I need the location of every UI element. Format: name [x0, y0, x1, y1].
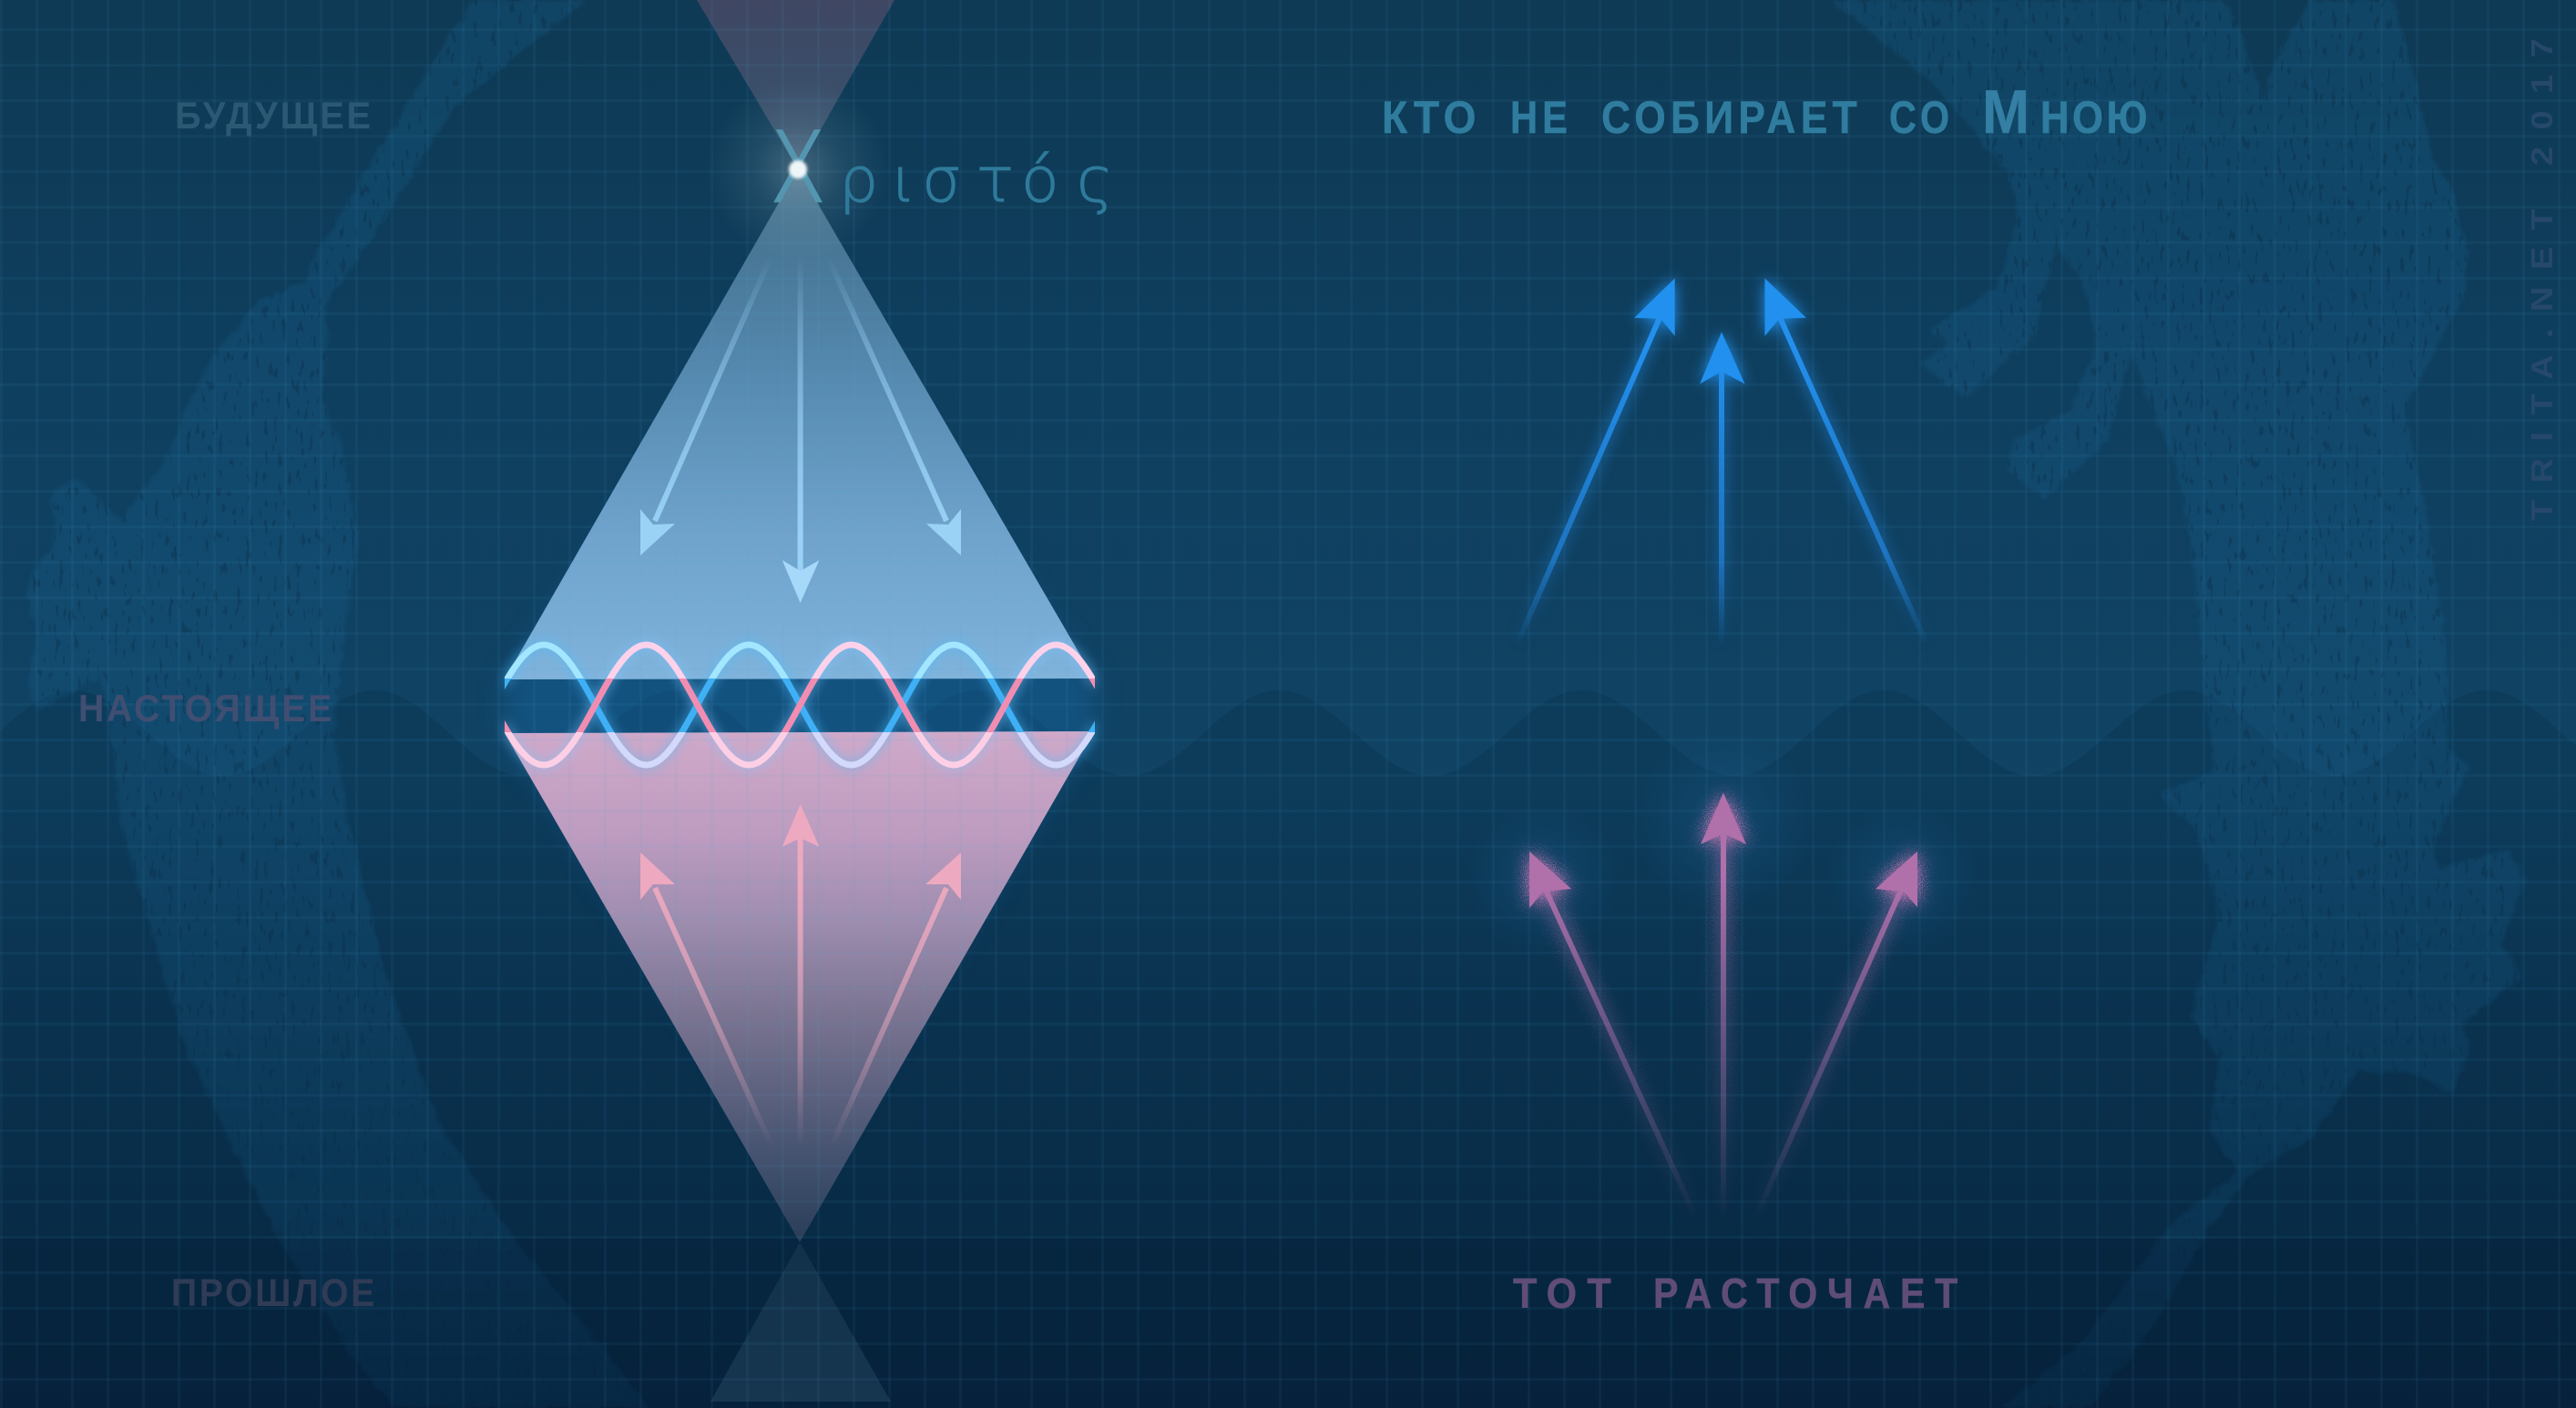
arrow: left: [640, 852, 772, 1146]
bottom cap triangle: [710, 1242, 891, 1402]
arrow: center: [782, 804, 820, 1146]
bottom dark band: [0, 1239, 2576, 1408]
arrow: center: [782, 255, 820, 603]
pink arrows inside triangle: [640, 804, 961, 1146]
arrow: left: [640, 255, 772, 556]
heading: who does not gather: НЕ: [1510, 92, 1572, 143]
capital chi: Χ: [771, 112, 825, 224]
pink wave: [505, 641, 1095, 769]
light point: [789, 160, 807, 179]
arrow: center: [1700, 332, 1745, 645]
label: past: ПРОШЛОЕ: [171, 1271, 377, 1315]
heading: who does not gather: [1382, 77, 2151, 147]
blue arrows inside triangle: [640, 255, 961, 603]
arrow: center: [1701, 793, 1746, 1220]
label: present: НАСТОЯЩЕЕ: [78, 687, 334, 730]
arrow: left: [1518, 279, 1675, 642]
watermark: TRITA.NET 2017: [2525, 22, 2559, 521]
heading: scatters: РАСТОЧАЕТ: [1653, 1270, 1968, 1317]
diagram glow halo: [505, 273, 1094, 1184]
heading: who does not gather: КТО: [1382, 92, 1481, 143]
pink arrows scatter: [1529, 793, 1917, 1222]
heading: who does not gather: М: [1982, 77, 2029, 147]
arrow: right: [1764, 279, 1926, 642]
halos behind pink arrows: [1467, 733, 1979, 956]
blue wave: [505, 641, 1095, 769]
blue arrows gather: [1518, 279, 1926, 645]
heading: who does not gather: НОЮ: [2040, 92, 2151, 143]
light halo: [707, 78, 889, 260]
christos label: [771, 112, 1113, 224]
figure: left arm and hand: [27, 0, 650, 1408]
heading: scatters: [1513, 1270, 1968, 1317]
greek word rest: ριστός: [839, 145, 1113, 217]
arrow: left: [1529, 852, 1698, 1222]
wave glow: [441, 645, 1159, 765]
figure: right body and hands: [1830, 0, 2526, 1408]
top cap triangle: [697, 0, 894, 169]
crisp wave strands: [505, 641, 1095, 769]
upper blue triangle: [505, 169, 1094, 679]
background wave band: [0, 0, 2576, 776]
label: future: БУДУЩЕЕ: [175, 94, 373, 137]
lower pink triangle: [505, 731, 1094, 1242]
heading: who does not gather: СО: [1889, 92, 1954, 143]
arrow: right: [827, 255, 961, 556]
intertwined waves: [441, 645, 1159, 765]
arrow: right: [1753, 852, 1917, 1222]
heading: scatters: ТОТ: [1513, 1270, 1621, 1317]
arrow: right: [832, 852, 961, 1146]
heading: who does not gather: СОБИРАЕТ: [1601, 92, 1862, 143]
